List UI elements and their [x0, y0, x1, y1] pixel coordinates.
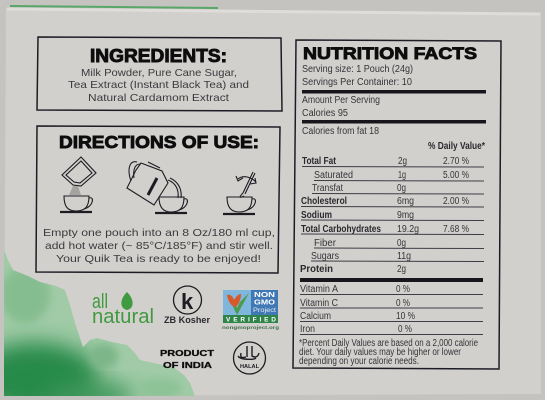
badge: all natural: natural [92, 306, 154, 328]
ingredients text: Natural Cardamom Extract [88, 92, 229, 104]
nutrient table [300, 156, 484, 282]
serving information: Servings Per Container: 10 [302, 77, 412, 88]
nutrient table: Saturated [314, 170, 353, 181]
label: product of India: OF INDIA [163, 360, 212, 370]
panel: directions of use [36, 126, 280, 273]
vitamins table [300, 284, 483, 335]
vitamins table: 0 % [396, 284, 410, 295]
nutrient table: Sodium [301, 210, 332, 221]
badge: halal: HALAL [240, 364, 260, 370]
badge: all natural: all [92, 291, 108, 313]
directions text: Your Quik Tea is ready to be enjoyed! [56, 253, 261, 265]
panel: ingredients [37, 37, 282, 111]
badge: Non GMO Project verified: GMO [254, 298, 275, 306]
ingredients text [68, 67, 249, 104]
icon: stirring cup [223, 172, 256, 214]
badge: Non GMO Project verified: nongmoproject.org [222, 325, 279, 330]
badge: ZB Kosher [164, 286, 210, 325]
badge: Non GMO Project verified [222, 290, 279, 330]
heading: directions of use: DIRECTIONS OF USE: [59, 132, 259, 152]
heading: nutrition facts: NUTRITION FACTS [303, 44, 477, 63]
ingredients text: Tea Extract (Instant Black Tea) and [68, 79, 249, 91]
badge: halal [234, 342, 266, 374]
directions text [43, 227, 275, 265]
icon: kettle pouring into cup [127, 162, 187, 213]
serving information [302, 64, 486, 152]
serving information: Calories from fat 18 [302, 126, 379, 137]
badge: Non GMO Project verified: NON [254, 290, 275, 299]
nutrient table: 0g [397, 183, 406, 194]
footnote: diet. Your daily values may be higher or lower [299, 347, 462, 358]
serving information: Serving size: 1 Pouch (24g) [302, 64, 413, 75]
nutrient table: 7.68 % [443, 224, 469, 235]
nutrient table: Sugars [311, 251, 339, 262]
vitamins table: Iron [300, 324, 315, 335]
nutrient table: 11g [397, 251, 411, 262]
green watercolor wash [4, 250, 195, 396]
serving information: Amount Per Serving [302, 95, 380, 106]
panel: nutrition facts [293, 40, 501, 369]
directions text: add hot water (~ 85°C/185°F) and stir well. [45, 240, 273, 252]
label: product of India: PRODUCT [160, 348, 215, 358]
footnote: *Percent Daily Values are based on a 2,000 calorie [299, 338, 478, 349]
serving information: Calories 95 [302, 108, 348, 119]
nutrient table: Cholesterol [301, 196, 347, 207]
vitamins table: 10 % [396, 311, 415, 322]
badge: Non GMO Project verified: Project [253, 308, 276, 314]
nutrient table: Fiber [314, 238, 337, 249]
heading: ingredients: INGREDIENTS: [90, 46, 227, 66]
badge: ZB Kosher: k [181, 289, 194, 314]
nutrient table: 6mg [397, 196, 414, 207]
nutrient table: Protein [300, 264, 333, 275]
nutrient table: Transfat [312, 183, 343, 194]
nutrient table: 2g [397, 264, 406, 275]
badge: ZB Kosher: ZB Kosher [164, 315, 210, 325]
badge: all natural [92, 291, 154, 328]
vitamins table: Vitamin C [300, 298, 338, 309]
directions text: Empty one pouch into an 8 Oz/180 ml cup, [43, 227, 275, 239]
nutrient table: 2.70 % [443, 156, 469, 167]
nutrient table: Total Carbohydrates [301, 224, 381, 235]
vitamins table: 0 % [396, 298, 410, 309]
icon: pouch into cup [60, 157, 96, 212]
footnote: depending on your calorie needs. [299, 356, 419, 367]
nutrient table: 2g [398, 156, 407, 167]
vitamins table: Calcium [300, 311, 331, 322]
nutrient table: 9mg [397, 210, 414, 221]
nutrient table: 2.00 % [443, 196, 469, 207]
nutrient table: Total Fat [302, 156, 337, 167]
vitamins table: Vitamin A [300, 284, 338, 295]
nutrient table: 0g [397, 238, 406, 249]
badge: Non GMO Project verified: VERIFIED [226, 316, 276, 324]
ingredients text: Milk Powder, Pure Cane Sugar, [81, 67, 237, 79]
nutrient table: 5.00 % [443, 170, 469, 181]
label: product of India [160, 348, 215, 370]
footnote [299, 338, 478, 367]
serving information: % Daily Value* [428, 141, 485, 152]
nutrient table: 19.2g [397, 224, 419, 235]
nutrient table: 1g [398, 170, 406, 181]
vitamins table: 0 % [398, 324, 412, 335]
